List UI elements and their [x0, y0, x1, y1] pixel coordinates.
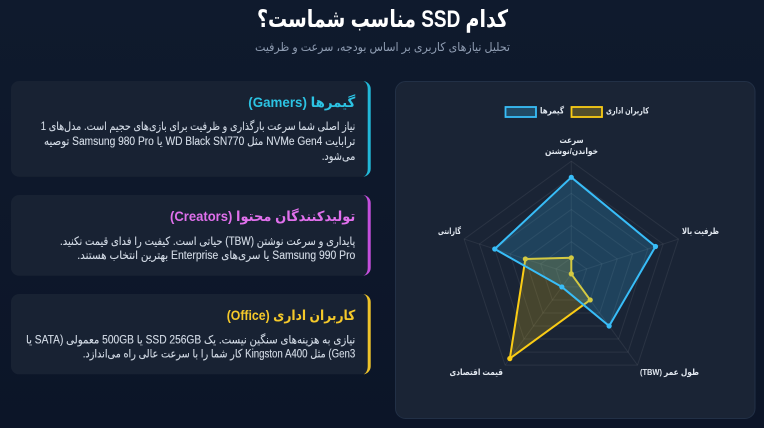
header	[255, 6, 510, 55]
axis labels: قیمت اقتصادی	[450, 367, 503, 377]
axis labels: خواندن/نوشتن	[545, 146, 598, 157]
heading: gamers: گیمرها (Gamers)	[248, 94, 356, 111]
panel: radar chart	[396, 82, 755, 418]
text: gamers description	[41, 119, 355, 164]
radar grid	[464, 161, 678, 365]
data series: gamers	[492, 175, 658, 329]
text: creators description: Samsung 990 Pro یا سری‌های Enterprise بهترین انتخاب هستند.	[77, 250, 355, 263]
text: office description: Gen3) مثل Kingston A400 کار شما را با سرعت عالی راه می‌اندازد.	[83, 349, 355, 362]
text: office description: نیازی به هزینه‌های سنگین نیست. یک SSD 256GB یا 500GB معمولی (SATA یا	[26, 332, 355, 347]
heading: office: کاربران اداری (Office)	[227, 307, 356, 324]
legend item: gamers	[506, 106, 564, 117]
panel: office	[11, 294, 371, 374]
axis labels: ظرفیت بالا	[682, 226, 719, 237]
text: office description	[26, 332, 355, 362]
panel: gamers	[11, 81, 371, 177]
axis labels: طول عمر (TBW)	[640, 367, 699, 378]
panel: creators	[11, 195, 371, 276]
text: gamers description: می‌شود.	[322, 151, 355, 164]
legend item: gamers: گیمرها	[540, 106, 564, 116]
legend item: office users: کاربران اداری	[606, 106, 649, 116]
text: creators description: پایداری و سرعت نوشتن (TBW) حیاتی است. کیفیت را فدای قیمت نکنید.	[60, 236, 355, 249]
data series: office users	[507, 255, 593, 361]
title: کدام SSD مناسب شماست؟	[257, 6, 508, 33]
text: gamers description: ترابایت NVMe Gen4 مثل WD Black SN770 یا Samsung 980 Pro توصیه	[44, 136, 355, 149]
axis labels: سرعت	[560, 135, 584, 146]
heading: creators: تولیدکنندگان محتوا (Creators)	[170, 208, 355, 225]
legend	[506, 106, 649, 117]
text: creators description	[60, 236, 355, 263]
axis labels	[438, 135, 719, 378]
subtitle: تحلیل نیازهای کاربری بر اساس بودجه، سرعت و ظرفیت	[255, 40, 510, 55]
legend item: office users	[572, 106, 649, 117]
axis labels: گارانتی	[438, 226, 461, 237]
text: gamers description: نیاز اصلی شما سرعت بارگذاری و ظرفیت برای بازی‌های حجیم است. مدل‌های 1	[41, 119, 355, 134]
